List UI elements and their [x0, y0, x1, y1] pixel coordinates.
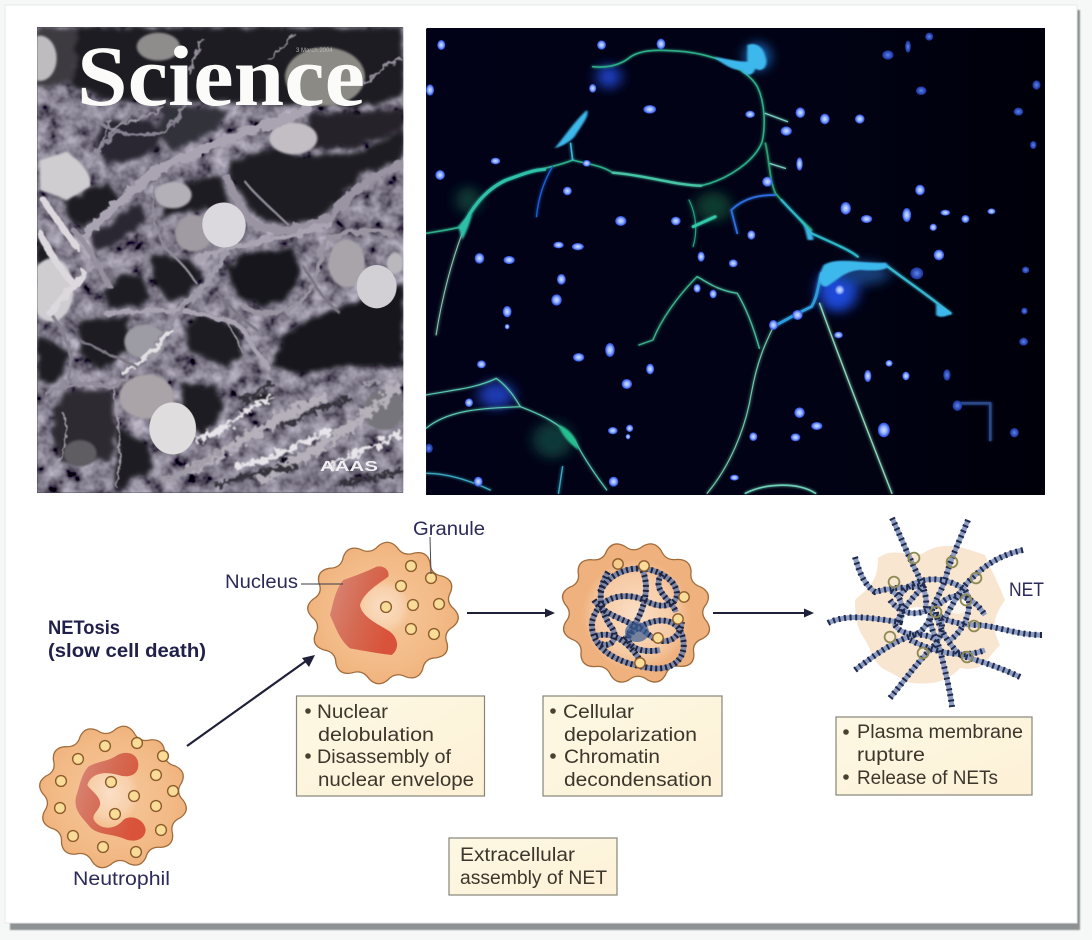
text box: extracellular assembly of NET: assembly of NET	[460, 868, 607, 889]
label: Granule with leader line: Granule	[413, 519, 485, 540]
text box: plasma membrane rupture: Plasma membrane	[857, 722, 1023, 743]
foreground bright cells	[149, 196, 397, 454]
diffuse glows	[456, 43, 890, 458]
label: Nucleus with leader line: Nucleus	[225, 572, 298, 593]
cell: nuclear delobulation stage	[303, 537, 463, 689]
text box: nuclear delobulation: Disassembly of	[317, 747, 452, 768]
text box: plasma membrane rupture: rupture	[857, 745, 925, 766]
heading: NETosis (slow cell death)	[48, 618, 206, 662]
label: Nucleus with leader line	[225, 572, 343, 593]
cell: neutrophil with lobed nucleus	[27, 714, 199, 880]
heading: NETosis (slow cell death): NETosis	[48, 618, 120, 639]
text box: extracellular assembly of NET	[449, 838, 617, 895]
text box: plasma membrane rupture: Release of NETs	[857, 768, 998, 789]
cover date: 3 March 2004	[296, 48, 333, 54]
dark gaps between the web	[37, 27, 403, 490]
panel: fluorescence micrograph of NET network	[425, 28, 1045, 495]
arrow: delobulation to depolarization	[467, 608, 555, 618]
residual granules	[885, 553, 981, 662]
nucleus	[330, 566, 397, 655]
bright cyan knots	[458, 44, 952, 450]
dense fibrin mass, lower right	[160, 368, 404, 491]
granules	[381, 561, 444, 639]
text box: cellular depolarization: decondensation	[564, 770, 712, 791]
chromatin tangle	[592, 566, 684, 668]
nucleus	[75, 753, 146, 841]
cell: chromatin decondensation stage	[546, 526, 726, 700]
heading: NETosis (slow cell death): (slow cell death)	[48, 641, 206, 662]
bright nuclei	[426, 39, 996, 487]
text box: cellular depolarization: Chromatin	[564, 747, 660, 768]
DNA strands	[828, 518, 1042, 707]
red blood cells, rear	[23, 33, 404, 467]
granules	[613, 559, 689, 668]
text box: nuclear delobulation: Nuclear	[317, 702, 389, 723]
text box: cellular depolarization: Cellular	[563, 702, 635, 723]
panel: Science journal cover micrograph	[23, 27, 404, 493]
arrow: depolarization to NET	[713, 608, 814, 618]
text box: cellular depolarization: depolarization	[564, 725, 697, 746]
text box: cellular depolarization	[543, 696, 722, 796]
text box: nuclear delobulation: delobulation	[318, 725, 434, 746]
label: Neutrophil: Neutrophil	[73, 869, 170, 890]
cover publisher mark: AAAS	[320, 458, 378, 475]
illustration: released NET with DNA strands	[828, 518, 1042, 707]
text box: extracellular assembly of NET: Extracellular	[460, 845, 576, 866]
cover title: Science	[77, 28, 365, 124]
arrow: neutrophil to delobulating cell	[187, 655, 315, 746]
dim nuclei	[425, 33, 1040, 453]
filaments	[426, 50, 990, 493]
text box: nuclear delobulation	[296, 696, 484, 796]
text box: nuclear delobulation: nuclear envelope	[318, 770, 474, 791]
granules	[55, 738, 178, 857]
fibrin web strands	[40, 33, 403, 487]
text box: plasma membrane rupture	[836, 717, 1032, 795]
label: NET: NET	[1009, 580, 1044, 601]
label: Granule with leader line	[413, 519, 485, 574]
